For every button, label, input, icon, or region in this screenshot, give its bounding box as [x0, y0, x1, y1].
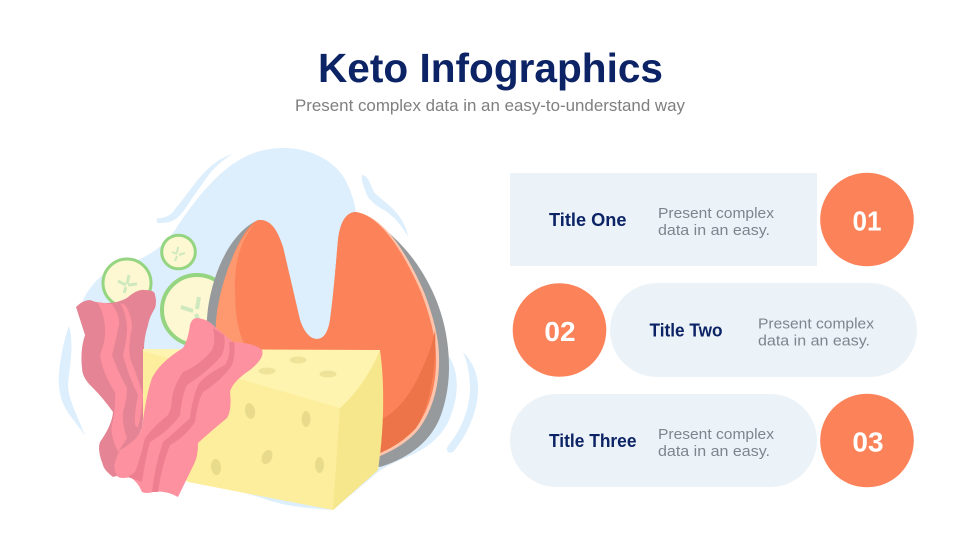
- heading: Title One: Title One: [549, 209, 626, 230]
- text block: item one: data in an easy.: [658, 223, 770, 239]
- panel: item one: [510, 173, 914, 266]
- illustration: keto foods: [59, 148, 478, 510]
- cheese wedge: [143, 349, 383, 510]
- number badge: 01: [820, 173, 914, 266]
- background blob: [83, 148, 457, 510]
- text block: item three: Present complex: [658, 427, 775, 443]
- salmon steak: [207, 212, 449, 467]
- text block: item one: Present complex: [658, 206, 775, 222]
- front bacon strip: [114, 318, 262, 497]
- heading: Title Three: Title Three: [549, 430, 636, 451]
- subtitle: Present complex data in an easy-to-understand way: [295, 97, 686, 115]
- panel: item two: [513, 283, 917, 377]
- heading: Title Two: Title Two: [650, 320, 722, 340]
- back bacon strip: [76, 290, 156, 477]
- number badge: 02: [513, 283, 606, 377]
- panel: item three: [510, 394, 914, 487]
- text block: item two: Present complex: [758, 316, 875, 332]
- cucumber slices: [103, 235, 232, 345]
- text block: item three: data in an easy.: [658, 444, 770, 460]
- number badge: 03: [820, 394, 914, 487]
- card: item one: [510, 173, 817, 266]
- card: item three: [510, 394, 817, 487]
- number badge: 02: 02: [544, 316, 576, 347]
- title: Keto Infographics: [318, 45, 663, 91]
- text block: item two: data in an easy.: [758, 334, 870, 350]
- decorative wisp: upper left: [157, 154, 233, 223]
- decorative wisp: lower right: [447, 352, 478, 453]
- decorative wisp: upper right: [362, 175, 408, 237]
- number badge: 03: 03: [852, 426, 884, 458]
- number badge: 01: 01: [852, 206, 882, 236]
- decorative wisp: lower left: [59, 326, 85, 436]
- card: item two: [610, 283, 917, 377]
